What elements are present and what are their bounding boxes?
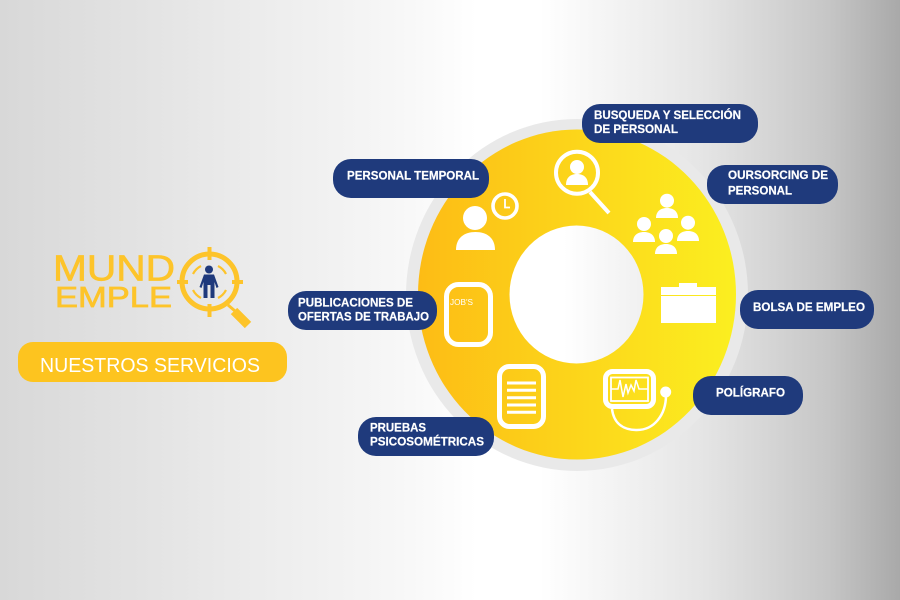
label: publicaciones de ofertas de trabajo: PUBLICACIONES DE: [298, 296, 413, 310]
logo wordmark: [53, 248, 175, 314]
icon: polygraph monitor: [606, 372, 671, 430]
logo wordmark: EMPLE: [55, 282, 172, 314]
icon: briefcase: [661, 283, 716, 323]
label: bolsa de empleo: BOLSA DE EMPLEO: [753, 300, 865, 314]
icon: test document: [500, 366, 544, 426]
icon: search magnifier: [556, 152, 609, 213]
label: busqueda y seleccion: DE PERSONAL: [594, 122, 678, 136]
yellow ring: [418, 130, 736, 460]
label: poligrafo: POLÍGRAFO: [716, 384, 785, 400]
label: oursorcing de personal: [707, 165, 838, 204]
centre hole: [510, 226, 644, 364]
label: oursorcing de personal: PERSONAL: [728, 184, 792, 198]
icon: group of people: [633, 194, 699, 254]
label: pruebas psicosometricas: [358, 417, 494, 456]
icon: job listing sheet: [446, 284, 490, 344]
icon: job listing sheet: JOB'S: [450, 298, 473, 307]
donut ring: [406, 119, 748, 471]
banner: nuestros servicios: [18, 342, 287, 382]
label: publicaciones de ofertas de trabajo: [288, 291, 437, 330]
icon: temporary person with clock: [456, 194, 517, 250]
logo person icon: [200, 266, 218, 298]
label: poligrafo: [693, 376, 803, 415]
label: bolsa de empleo: [740, 290, 874, 329]
label: busqueda y seleccion: [582, 104, 758, 143]
label: pruebas psicosometricas: PRUEBAS: [370, 420, 426, 434]
label: personal temporal: [333, 159, 489, 198]
label: oursorcing de personal: OURSORCING DE: [728, 168, 828, 182]
logo target magnifier: [177, 247, 248, 325]
label: publicaciones de ofertas de trabajo: OFERTAS DE TRABAJO: [298, 310, 429, 324]
logo wordmark: MUND: [53, 248, 175, 288]
outer grey ring: [406, 119, 748, 471]
banner: nuestros servicios: NUESTROS SERVICIOS: [40, 355, 260, 377]
label: personal temporal: PERSONAL TEMPORAL: [347, 168, 479, 182]
logo: Mundo Empleo: [53, 247, 248, 325]
label: busqueda y seleccion: BUSQUEDA Y SELECCIÓN: [594, 107, 741, 122]
label: pruebas psicosometricas: PSICOSOMÉTRICAS: [370, 434, 484, 448]
